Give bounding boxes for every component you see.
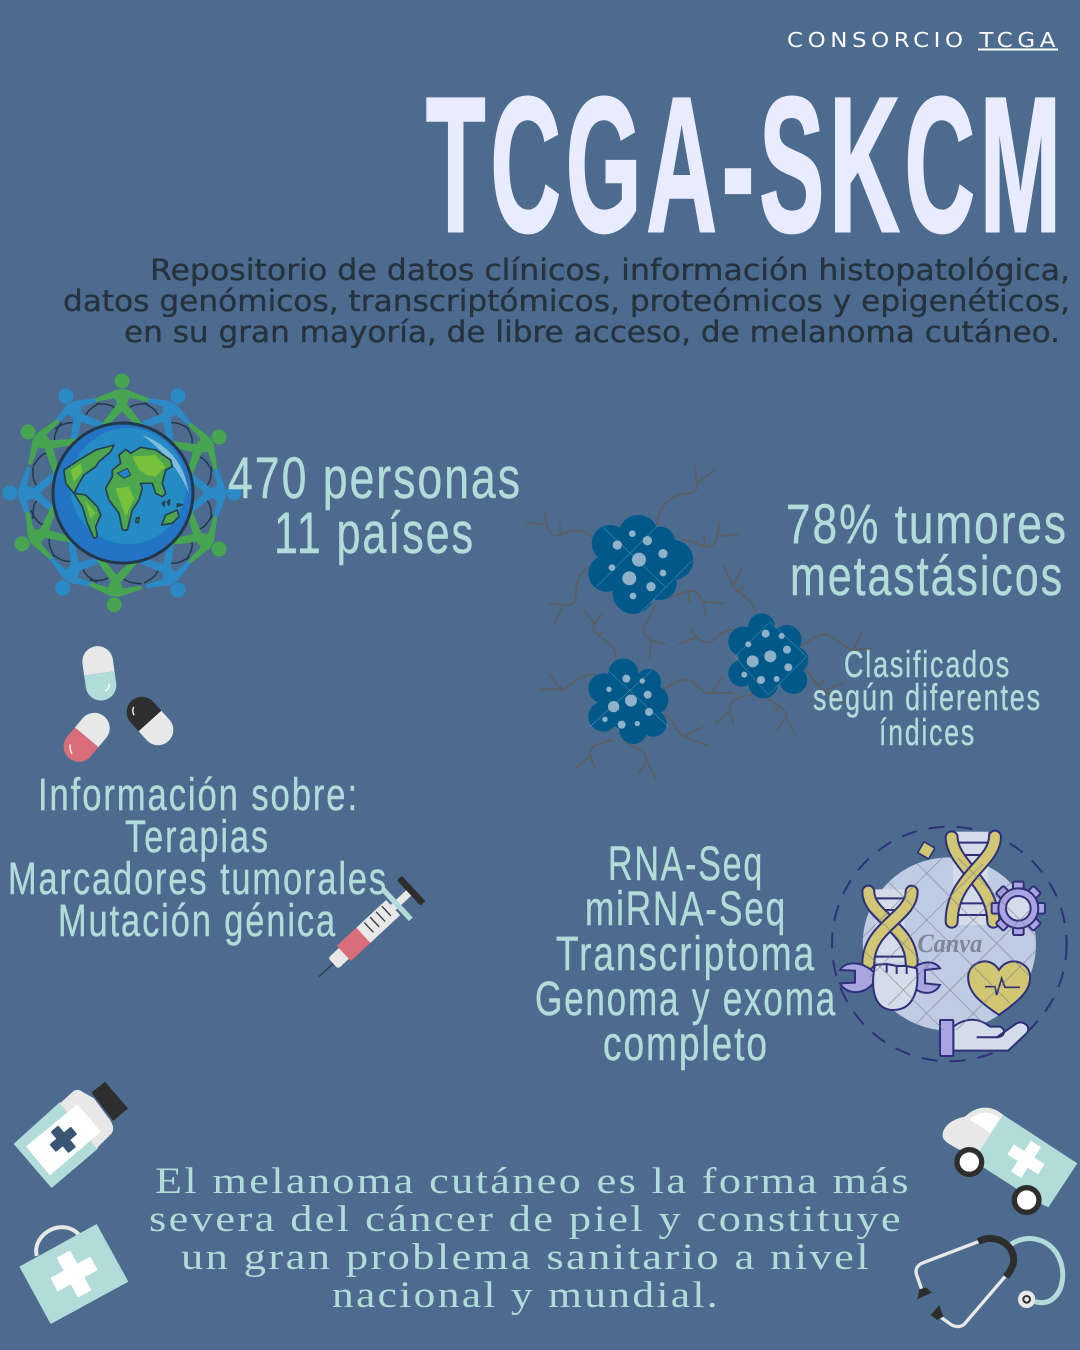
text: information about: Terapias	[125, 811, 270, 862]
text: melanoma statement	[149, 1161, 911, 1316]
text: melanoma statement: severa del cáncer de piel y constituye	[149, 1199, 903, 1240]
text: sequencing data types	[535, 838, 837, 1071]
icon: capsules	[57, 644, 180, 768]
icon: ambulance	[943, 1108, 1077, 1212]
text: classified by indices: Clasificados	[844, 644, 1011, 685]
description text: Repositorio de datos clínicos, información histopatológica,	[150, 253, 1070, 287]
icon: stethoscope	[916, 1238, 1063, 1327]
description text: en su gran mayoría, de libre acceso, de melanoma cutáneo.	[124, 315, 1060, 349]
text: melanoma statement: un gran problema sanitario a nivel	[181, 1237, 871, 1278]
icon: globe with people ring	[3, 374, 241, 614]
text: sequencing data types: miRNA-Seq	[585, 883, 787, 936]
stat: people and countries: 11 países	[274, 501, 475, 566]
text: information about: Marcadores tumorales	[8, 853, 388, 904]
text: sequencing data types: RNA-Seq	[608, 838, 764, 891]
description text: datos genómicos, transcriptómicos, proteómicos y epigenéticos,	[63, 284, 1070, 318]
text: information about: Información sobre:	[38, 769, 359, 820]
stat: people and countries: 470 personas	[228, 446, 522, 511]
text: sequencing data types: Genoma y exoma	[535, 973, 837, 1026]
text: information about: Mutación génica	[58, 895, 337, 946]
stat: people and countries	[228, 446, 522, 566]
stat: metastatic tumours	[786, 492, 1068, 607]
header: consorcio label: CONSORCIO TCGA	[787, 28, 1060, 52]
icon: genomics and health: Canva	[917, 929, 982, 958]
icon: genomics and health	[832, 827, 1067, 1061]
text: sequencing data types: Transcriptoma	[556, 928, 816, 981]
text: information about	[8, 769, 388, 946]
icon: syringe	[305, 873, 428, 992]
text: classified by indices: índices	[879, 712, 976, 753]
text: melanoma statement: El melanoma cutáneo es la forma más	[155, 1161, 911, 1202]
text: classified by indices	[813, 644, 1042, 753]
description text	[63, 253, 1070, 349]
icon: metastatic tumour cells	[527, 467, 872, 778]
icon: medicine bottle	[15, 1083, 127, 1187]
text: sequencing data types: completo	[603, 1018, 769, 1071]
text: melanoma statement: nacional y mundial.	[332, 1275, 720, 1316]
icon: first aid kit	[19, 1224, 128, 1324]
